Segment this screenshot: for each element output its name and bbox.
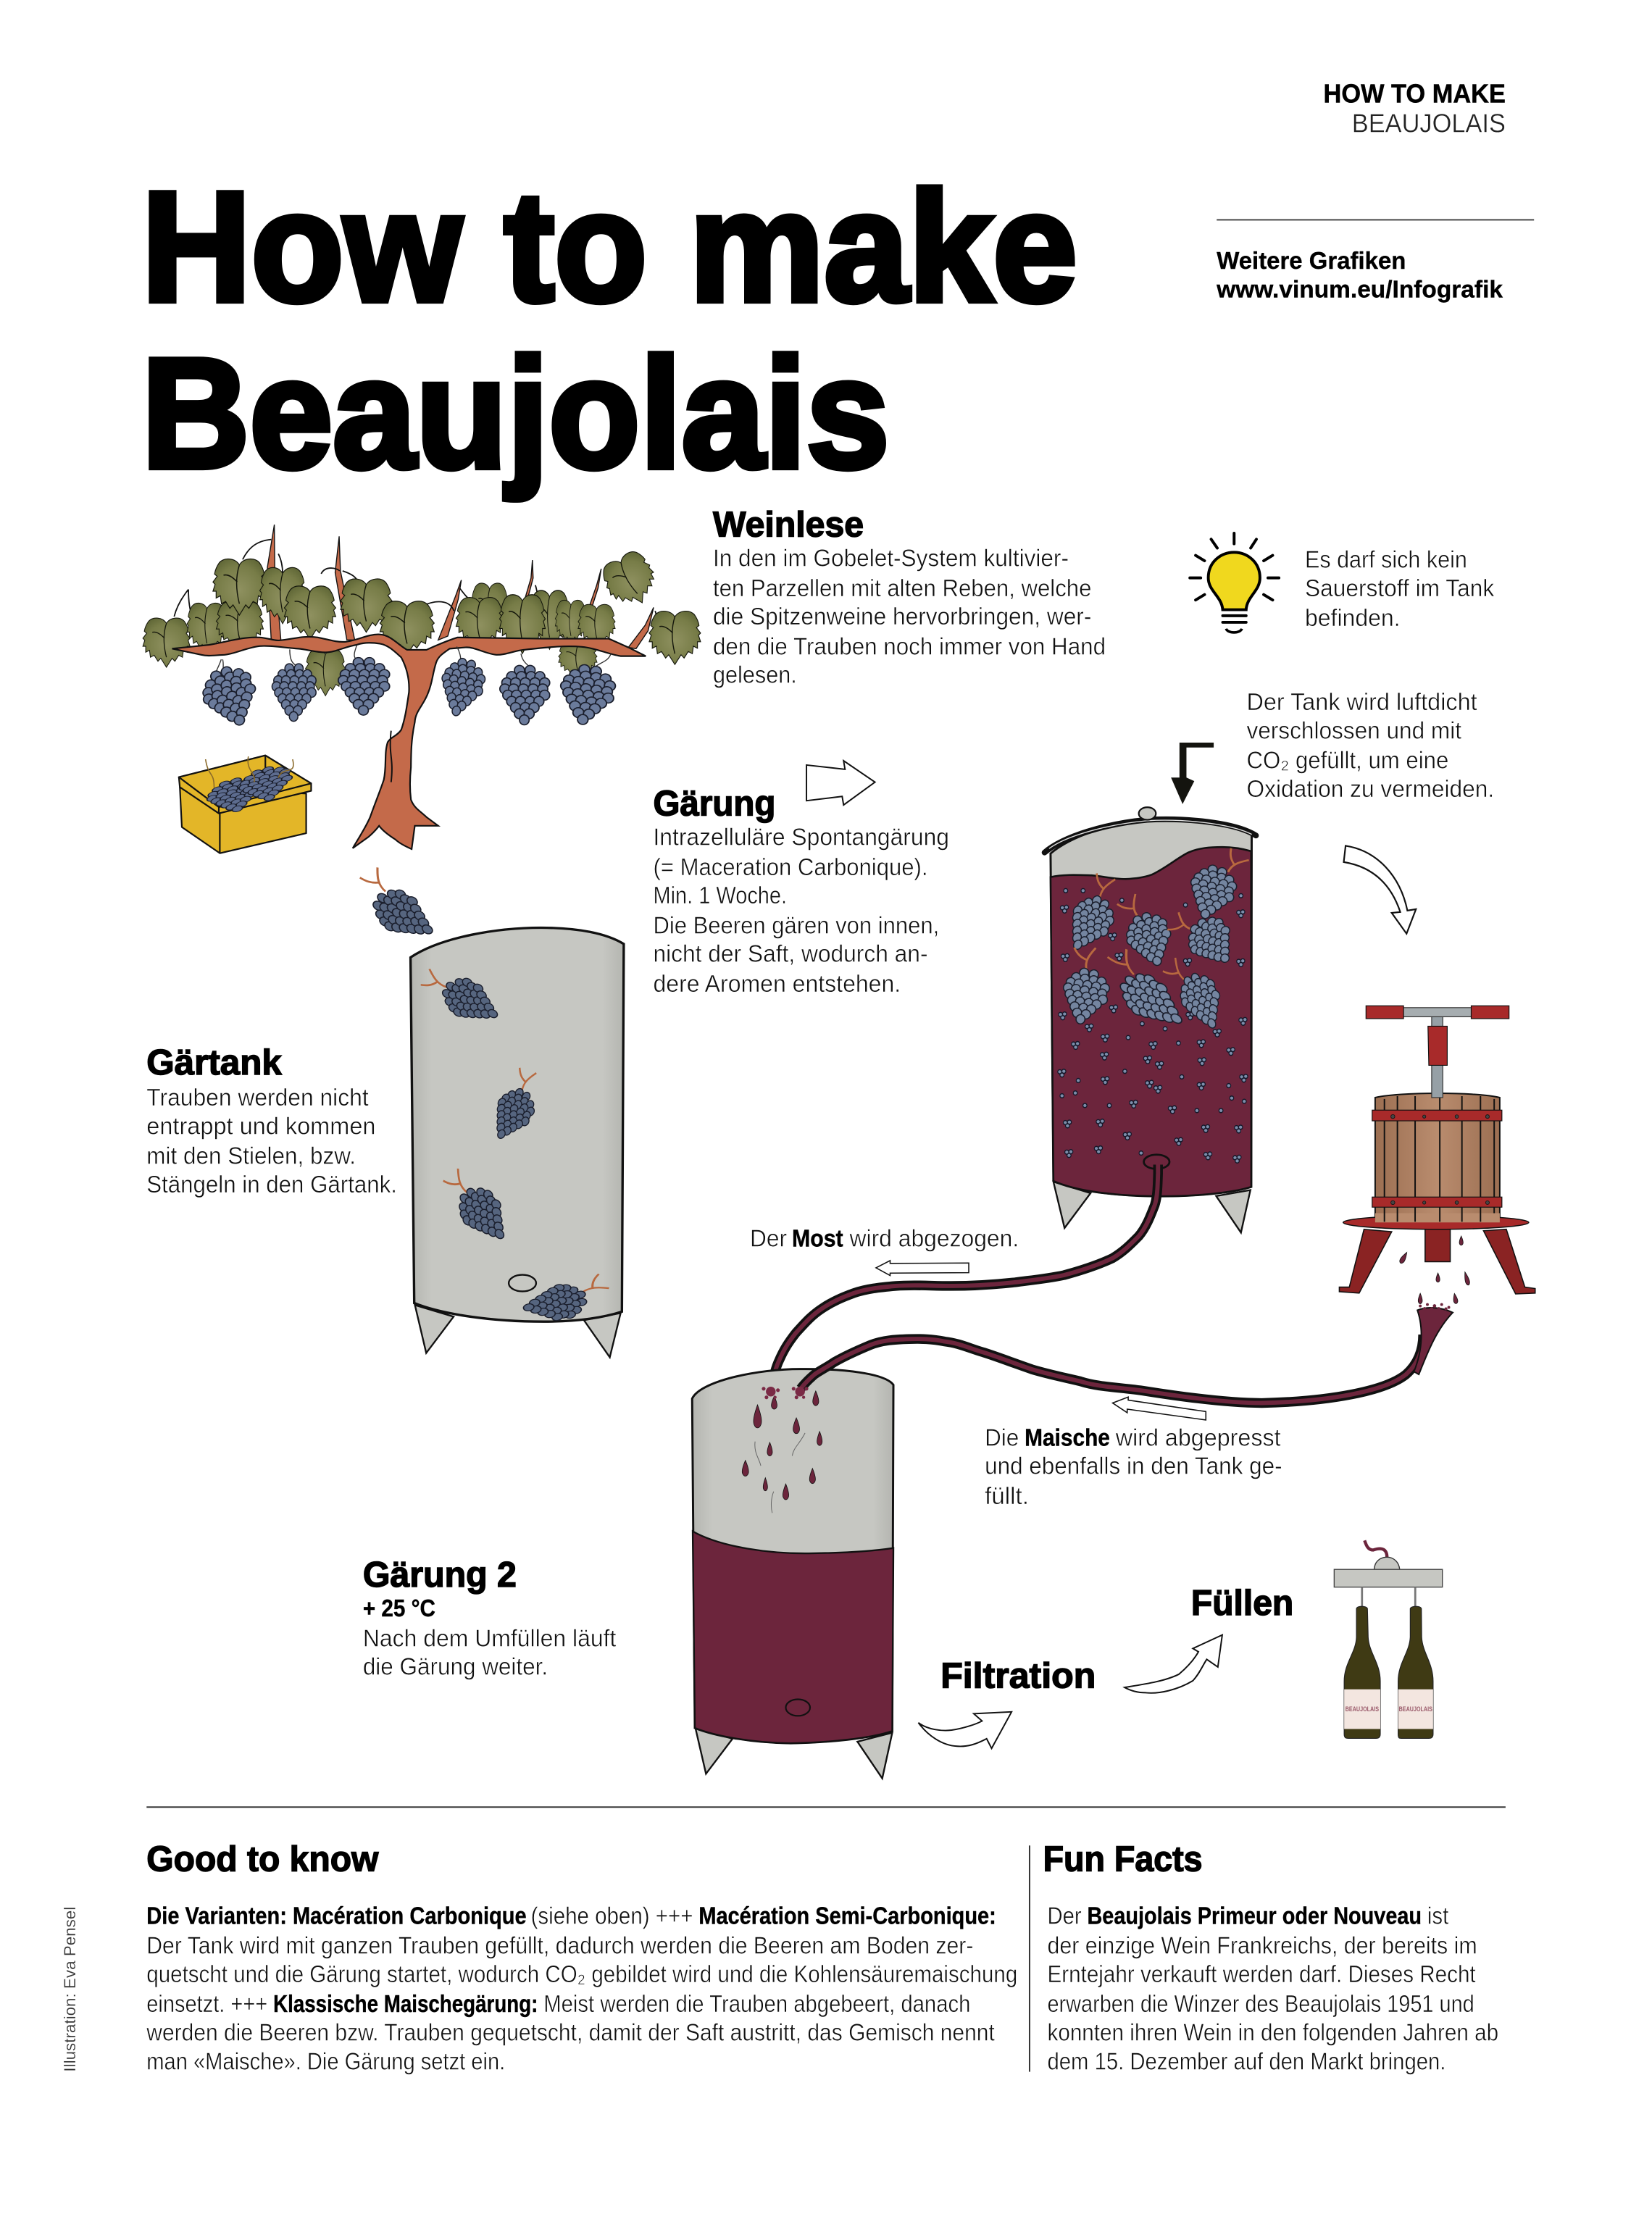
panel: Good to know: Good to know bbox=[146, 1840, 379, 1879]
callout: no oxygen: Sauerstoff im Tank bbox=[1305, 575, 1494, 602]
wine bbox=[1051, 847, 1251, 1196]
panel: Good to know: Klassische Maischegärung: bbox=[273, 1990, 538, 2018]
header tag bbox=[1324, 78, 1506, 138]
barrel bbox=[1375, 1093, 1500, 1222]
text block: Gärtank: Stängeln in den Gärtank. bbox=[146, 1171, 397, 1198]
filler rods bbox=[1362, 1587, 1415, 1608]
press handle grips bbox=[1366, 1006, 1509, 1065]
caption: mash: füllt. bbox=[985, 1482, 1029, 1510]
panel: Good to know: (siehe oben) +++ bbox=[531, 1902, 693, 1929]
caption: must bbox=[750, 1224, 1019, 1252]
caption: mash bbox=[985, 1424, 1282, 1510]
filler bar bbox=[1334, 1569, 1443, 1587]
bottle right bbox=[1398, 1606, 1433, 1738]
panel: Fun Facts: Erntejahr verkauft werden darf. Dieses Recht bbox=[1048, 1960, 1476, 1988]
side rule bbox=[1217, 219, 1534, 220]
text block: Gärung 2: die Gärung weiter. bbox=[363, 1653, 548, 1681]
text block: Gärung 2: Gärung 2 bbox=[363, 1555, 517, 1595]
lid knob bbox=[1139, 807, 1156, 820]
more graphics link bbox=[1216, 248, 1503, 303]
title bbox=[141, 159, 1077, 501]
illustration: wine press bbox=[1339, 1006, 1535, 1304]
bottle label left: BEAUJOLAIS bbox=[1346, 1705, 1379, 1713]
header tag: BEAUJOLAIS bbox=[1352, 109, 1506, 138]
bottle label left bbox=[1344, 1690, 1380, 1729]
tank outlet bbox=[785, 1699, 810, 1716]
panel: Good to know: man «Maische». Die Gärung setzt ein. bbox=[146, 2048, 505, 2076]
grape clusters in wine bbox=[1058, 838, 1251, 1038]
vine trunk and branches bbox=[172, 635, 646, 849]
vine tendrils bbox=[174, 540, 665, 625]
tank legs bbox=[415, 1305, 621, 1357]
more graphics link: Weitere Grafiken bbox=[1217, 248, 1406, 275]
label: Füllen: Füllen bbox=[1191, 1584, 1293, 1623]
arrow: to bottling bbox=[1125, 1635, 1222, 1693]
icon: light bulb bbox=[1190, 533, 1279, 632]
title: Beaujolais bbox=[141, 325, 890, 501]
filler dome bbox=[1374, 1557, 1400, 1569]
panel: Good to know: einsetzt. +++ bbox=[146, 1990, 267, 2018]
bottle label right: BEAUJOLAIS bbox=[1399, 1705, 1432, 1713]
text block: Gärtank: Trauben werden nicht bbox=[146, 1084, 369, 1111]
illustration: grapevine bbox=[143, 525, 701, 849]
column divider bbox=[1029, 1845, 1030, 2072]
panel: Fun Facts: der einzige Wein Frankreichs, der bereits im bbox=[1048, 1932, 1477, 1960]
illustration: final tank bbox=[692, 1369, 893, 1779]
panel: Fun Facts: Der bbox=[1048, 1902, 1082, 1929]
hoop rivets bbox=[1391, 1114, 1489, 1205]
crate grapes bbox=[203, 761, 297, 819]
panel: Fun Facts: Fun Facts bbox=[1043, 1840, 1203, 1879]
illustration: fermentation tank with whole bunches bbox=[411, 927, 624, 1357]
tank legs bbox=[1054, 1182, 1251, 1232]
text block: Weinlese: ten Parzellen mit alten Reben, welche bbox=[713, 575, 1091, 602]
illustrations layer bbox=[143, 525, 1535, 1779]
text layer bbox=[61, 78, 1534, 2076]
panel: Fun Facts: erwarben die Winzer des Beaujolais 1951 und bbox=[1048, 1990, 1474, 2018]
panel: Fun Facts: ist bbox=[1427, 1902, 1449, 1929]
press drops bbox=[1398, 1236, 1470, 1304]
panel: Fun Facts: konnten ihren Wein in den folgenden Jahren ab bbox=[1048, 2018, 1498, 2046]
text block: Gärung 2 bbox=[363, 1555, 617, 1681]
title: How to make bbox=[141, 159, 1077, 334]
text block: Weinlese bbox=[713, 505, 1106, 689]
panel: Good to know: quetscht und die Gärung startet, wodurch CO₂ gebildet wird und die Kohlensäuremaischung bbox=[146, 1960, 1017, 1988]
arrow: must drawn off bbox=[876, 1261, 969, 1276]
text block: Gärtank: entrappt und kommen bbox=[146, 1112, 375, 1140]
caption: mash: Die bbox=[985, 1424, 1019, 1451]
bottom rule bbox=[146, 1806, 1506, 1808]
text block: Gärung 2: + 25 °C bbox=[363, 1595, 435, 1622]
tank outlet bbox=[1144, 1155, 1169, 1169]
panel: Fun Facts bbox=[1043, 1840, 1498, 2076]
callout: airtight tank: verschlossen und mit bbox=[1246, 717, 1462, 744]
panel: Fun Facts: dem 15. Dezember auf den Markt bringen. bbox=[1048, 2048, 1446, 2076]
header tag: HOW TO MAKE bbox=[1324, 78, 1506, 108]
arrow: fermentation direction bbox=[806, 761, 875, 805]
illustration: bottling bbox=[1334, 1540, 1443, 1738]
panel: Good to know: Der Tank wird mit ganzen Trauben gefüllt, dadurch werden die Beeren am Boden zer- bbox=[146, 1932, 973, 1960]
more graphics link: www.vinum.eu/Infografik bbox=[1216, 276, 1503, 303]
panel: Good to know: Macération Semi-Carbonique: bbox=[698, 1902, 996, 1929]
illustration: sealed maceration tank bbox=[1045, 807, 1256, 1232]
vine shoots bbox=[267, 525, 654, 648]
text block: Gärung: Gärung bbox=[653, 784, 775, 823]
text block: Weinlese: Weinlese bbox=[713, 505, 864, 544]
text block: Weinlese: den die Trauben noch immer von Hand bbox=[713, 632, 1106, 660]
text block: Gärung: (= Maceration Carbonique). bbox=[653, 853, 928, 881]
arrow: tank to press bbox=[1344, 845, 1416, 934]
tank legs bbox=[696, 1728, 892, 1779]
panel: Good to know: Meist werden die Trauben abgebeert, danach bbox=[543, 1990, 970, 2018]
text block: Gärung: Intrazelluläre Spontangärung bbox=[653, 824, 949, 851]
tank body bbox=[411, 927, 624, 1321]
text block: Weinlese: In den im Gobelet-System kultivier- bbox=[713, 545, 1069, 572]
press legs bbox=[1339, 1229, 1535, 1294]
filler pipe bbox=[1364, 1540, 1387, 1558]
callout: no oxygen bbox=[1305, 546, 1494, 632]
text block: Gärung: dere Aromen entstehen. bbox=[653, 970, 901, 998]
wine level bbox=[693, 1532, 893, 1743]
wine drops bbox=[742, 1391, 822, 1500]
illustration: hose funnel bbox=[1414, 1303, 1453, 1374]
text block: Gärtank: mit den Stielen, bzw. bbox=[146, 1143, 356, 1170]
barrel staves bbox=[1385, 1096, 1494, 1222]
panel: Good to know: werden die Beeren bzw. Trauben gequetscht, damit der Saft austritt, das Gemisch nennt bbox=[146, 2018, 995, 2046]
text block: Gärung bbox=[653, 784, 949, 998]
press screw bbox=[1432, 1016, 1443, 1098]
hose end splashes bbox=[762, 1387, 809, 1399]
bottle label right bbox=[1398, 1690, 1433, 1729]
callout: airtight tank bbox=[1246, 688, 1494, 803]
callout: airtight tank: Oxidation zu vermeiden. bbox=[1246, 775, 1494, 803]
press spout bbox=[1425, 1229, 1451, 1261]
callout: airtight tank: Der Tank wird luftdicht bbox=[1246, 688, 1477, 716]
tank shell bbox=[1051, 819, 1251, 1196]
press base ring bbox=[1343, 1216, 1529, 1229]
illustration credit: Illustration: Eva Pensel bbox=[61, 1907, 79, 2072]
press handle bar bbox=[1403, 1008, 1472, 1016]
caption: must: wird abgezogen. bbox=[849, 1224, 1019, 1252]
caption: must: Der bbox=[750, 1224, 787, 1252]
text block: Weinlese: gelesen. bbox=[713, 661, 797, 689]
bottle left bbox=[1344, 1606, 1380, 1738]
arrow: to filtration bbox=[918, 1712, 1011, 1748]
vine grape bunches bbox=[214, 645, 611, 678]
text block: Gärung: Die Beeren gären von innen, bbox=[653, 911, 939, 939]
vine leaves bbox=[143, 547, 701, 696]
illustration: must hose bbox=[772, 1165, 1158, 1389]
tank body bbox=[692, 1369, 893, 1743]
illustration: crate with grapes bbox=[179, 756, 311, 853]
label: Filtration: Filtration bbox=[940, 1656, 1096, 1695]
vine trunk line bbox=[391, 731, 392, 782]
caption: mash: und ebenfalls in den Tank ge- bbox=[985, 1453, 1282, 1480]
caption: mash: wird abgepresst bbox=[1115, 1424, 1281, 1451]
illustration: falling grape bunch bbox=[341, 861, 446, 950]
text block: Gärtank bbox=[146, 1043, 397, 1198]
grape bunches in tank bbox=[413, 959, 613, 1326]
caption: must: Most bbox=[792, 1224, 843, 1252]
barrel hoops bbox=[1372, 1110, 1502, 1207]
text block: Gärung: Min. 1 Woche. bbox=[653, 882, 787, 909]
text block: Gärung 2: Nach dem Umfüllen läuft bbox=[363, 1624, 617, 1652]
panel: Fun Facts: Beaujolais Primeur oder Nouveau bbox=[1087, 1902, 1422, 1929]
caption: mash: Maische bbox=[1025, 1424, 1110, 1451]
text block: Weinlese: die Spitzenweine hervorbringen, wer- bbox=[713, 603, 1091, 630]
illustration: mash hose bbox=[801, 1335, 1423, 1403]
arrow: mash pressed bbox=[1113, 1397, 1206, 1420]
panel: Good to know bbox=[146, 1840, 1017, 2076]
text block: Gärung: nicht der Saft, wodurch an- bbox=[653, 940, 928, 968]
text block: Gärtank: Gärtank bbox=[146, 1043, 283, 1082]
tank outlet bbox=[509, 1275, 536, 1291]
arrow: fill into tank bbox=[1171, 743, 1214, 804]
crate body bbox=[180, 787, 306, 853]
callout: airtight tank: CO₂ gefüllt, um eine bbox=[1246, 747, 1448, 774]
panel: Good to know: Die Varianten: Macération Carbonique bbox=[146, 1902, 527, 1929]
callout: no oxygen: befinden. bbox=[1305, 604, 1401, 632]
callout: no oxygen: Es darf sich kein bbox=[1305, 546, 1467, 574]
tank lid bbox=[1045, 819, 1256, 853]
loose berries bbox=[1058, 888, 1248, 1163]
